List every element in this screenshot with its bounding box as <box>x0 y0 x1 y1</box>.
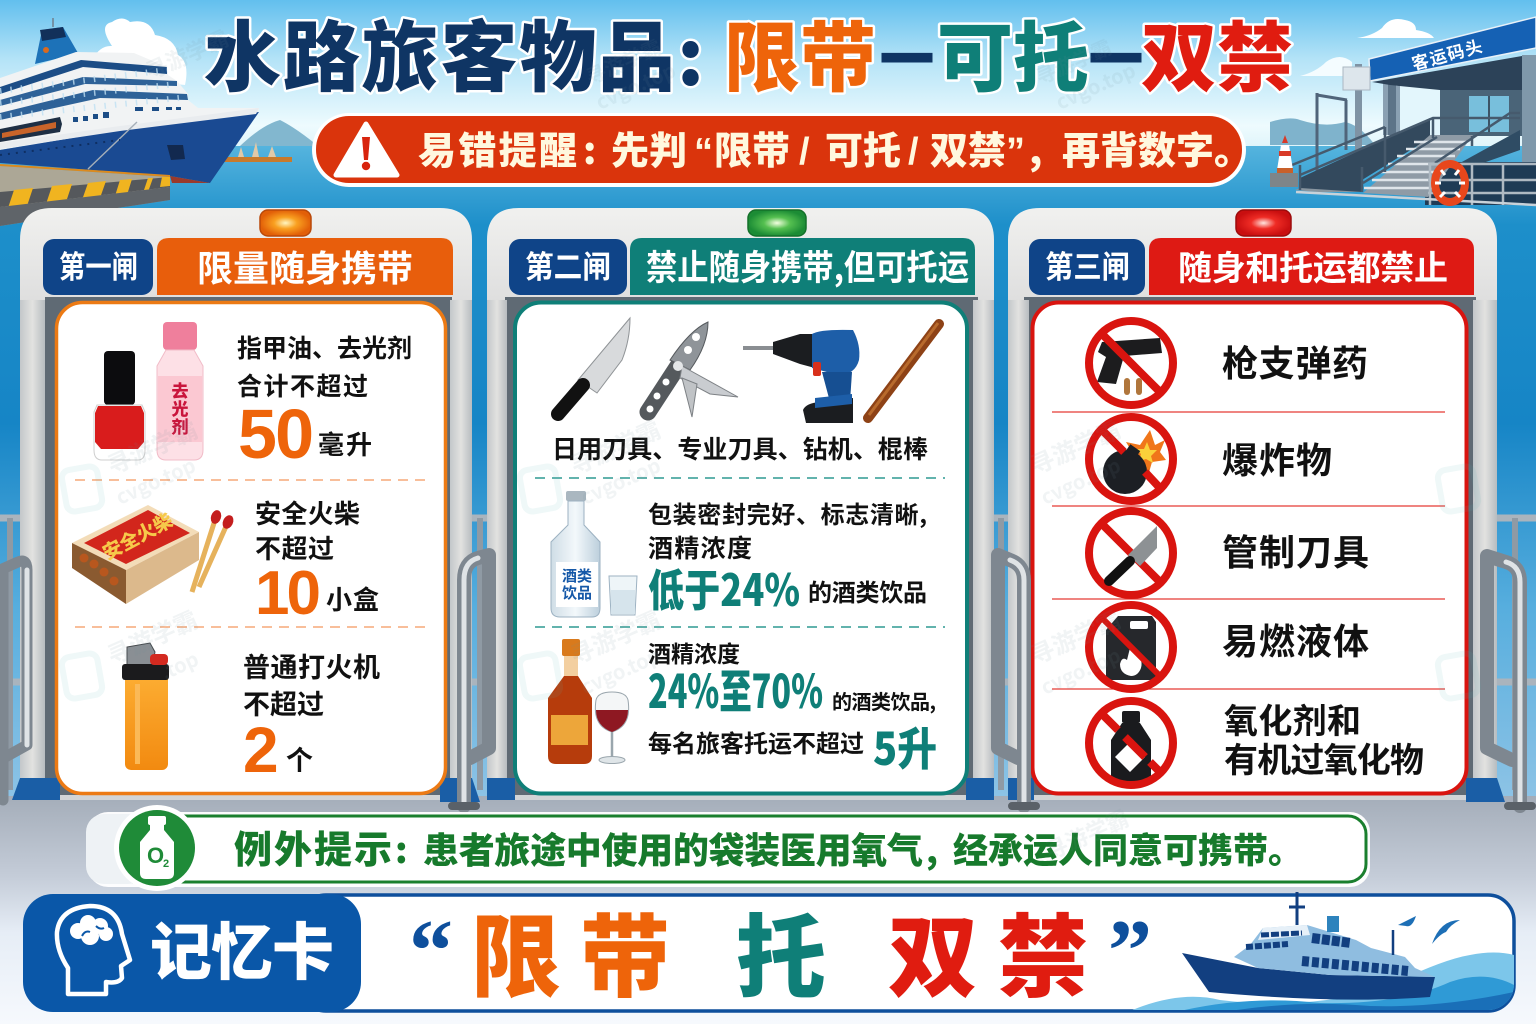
watermarks: cvgo.top <box>1036 450 1125 510</box>
gate number label 2: 第二闸 <box>525 242 611 287</box>
text: under 24 percent <box>648 495 927 619</box>
watermarks: cvgo.top <box>591 55 680 115</box>
text: under 24 percent: 低于24% <box>648 555 800 619</box>
icon: passenger boat <box>1182 892 1460 1000</box>
text: 24 to 70 percent <box>648 635 937 778</box>
panel: limited carry items <box>56 302 446 794</box>
text: lighter limit: 2 <box>243 714 279 786</box>
exception text <box>234 819 1303 874</box>
title: 水路旅客物品: <box>204 0 704 108</box>
watermarks: cvgo.top <box>576 450 665 510</box>
watermarks: 寻游学霸 <box>564 600 666 671</box>
text: lighter limit: 个 <box>286 739 313 778</box>
exception text: 患者旅途中使用的袋装医用氧气 <box>423 822 923 874</box>
terminal sign text: 客运码头 <box>1409 32 1485 75</box>
icon: oxygen bottle: 2 <box>163 858 169 870</box>
watermarks: 寻游学霸 <box>101 410 203 481</box>
text: under 24 percent: 包装密封完好、标志清晰, <box>648 495 927 530</box>
title: 可托 <box>937 0 1089 107</box>
icon: oxygen bottle <box>114 805 200 891</box>
title: 限带 <box>724 0 876 107</box>
icon: nail polish <box>94 351 145 460</box>
mnemonic text: 双禁 <box>888 885 1088 1015</box>
title: 双禁 <box>1141 0 1293 107</box>
icon: no flammable liquids <box>1089 605 1173 689</box>
text: 24 to 70 percent: 5升 <box>873 713 937 778</box>
text: lighter limit <box>243 646 380 786</box>
text: oxidizers: 有机过氧化物 <box>1224 733 1424 782</box>
banner text <box>418 120 1252 175</box>
icon: clear liquor bottle and glass <box>551 491 637 617</box>
heading: memory card label <box>23 894 361 1012</box>
icon: no controlled knives <box>1089 511 1173 595</box>
icon: lighter <box>122 643 169 770</box>
exception text: 经承运人同意可携带。 <box>953 823 1303 874</box>
icon: no explosives <box>1089 417 1173 501</box>
text: nail polish limit: 合计不超过 <box>237 367 368 403</box>
icon: safety matches <box>72 505 235 604</box>
banner text: 双禁 <box>930 120 1006 175</box>
icon: polish remover bottle: 去 <box>172 377 188 402</box>
exception note bar <box>86 805 1370 891</box>
text: nail polish limit <box>237 329 412 473</box>
chrome barrier handrails <box>0 555 1532 806</box>
text: nail polish limit: 50 <box>238 395 314 473</box>
watermarks: 寻游学霸 <box>1024 410 1126 481</box>
text: matches limit <box>255 494 379 628</box>
background: sky <box>0 0 1536 148</box>
banner text: “ <box>694 131 713 173</box>
mnemonic text: 托 <box>736 885 826 1015</box>
text: 24 to 70 percent: 24%至70% <box>648 656 823 722</box>
text: 24 to 70 percent: 每名旅客托运不超过 <box>648 724 864 759</box>
icon: safety matches: 安全火柴 <box>97 506 177 565</box>
watermarks: 寻游学霸 <box>140 21 233 86</box>
text: nail polish limit: 指甲油、去光剂 <box>237 329 412 365</box>
watermarks: 寻游学霸 <box>564 410 666 481</box>
heading: memory card label: 记忆卡 <box>150 902 334 992</box>
icon: polish remover bottle: 光 <box>172 395 188 420</box>
watermarks: 寻游学霸 <box>1024 600 1126 671</box>
banner text: 可托 <box>825 120 901 175</box>
gate 1: limited carry <box>12 208 480 802</box>
icon: folding knife <box>646 322 738 417</box>
text: matches limit: 10 <box>255 559 321 628</box>
watermarks: 寻游学霸 <box>581 31 666 90</box>
icon: wooden stick <box>868 323 939 418</box>
indicator light: red <box>1236 210 1291 236</box>
watermarks: 寻游学霸 <box>1040 801 1133 866</box>
background: sea <box>0 146 1536 806</box>
watermarks: .top <box>156 643 203 685</box>
banner text: 先判 <box>611 120 687 175</box>
banner text: ” <box>1006 131 1025 173</box>
mnemonic text <box>409 885 1152 1015</box>
text: lighter limit: 普通打火机 <box>243 646 380 685</box>
text: oxidizers: 氧化剂和 <box>1224 694 1361 743</box>
icon: polish remover bottle <box>157 322 203 460</box>
text: lighter limit: 不超过 <box>243 683 324 722</box>
panel: checked only items <box>515 302 967 794</box>
watermarks: 寻游学霸 <box>1031 31 1116 90</box>
watermarks: cvgo.top <box>1036 640 1125 700</box>
text: explosives: 爆炸物 <box>1222 432 1332 484</box>
gate 2: checked only <box>487 208 994 800</box>
icon: clear liquor bottle and glass: 饮品 <box>562 582 592 603</box>
gate frame 1 <box>20 208 472 800</box>
gate number label 2 <box>509 239 627 295</box>
heading: limited carry <box>157 238 453 295</box>
text: 24 to 70 percent: 的酒类饮品, <box>832 686 936 715</box>
clouds and distant mountains <box>92 18 1434 162</box>
mnemonic text: ” <box>1108 903 1152 1000</box>
icon: head with brain <box>57 906 130 994</box>
panel: banned items <box>1032 302 1466 794</box>
icon: polish remover bottle: 剂 <box>172 413 188 438</box>
text: matches limit: 不超过 <box>255 529 334 566</box>
background: deck floor <box>0 796 1536 1024</box>
illustration: passenger terminal <box>1270 17 1536 205</box>
illustration: pier <box>0 165 170 226</box>
gate number label 3: 第三闸 <box>1045 242 1130 287</box>
side and between-gate railing <box>0 518 1536 790</box>
gate frame 2 <box>487 208 994 800</box>
banner text: , <box>1029 120 1042 175</box>
icon: warning triangle <box>336 124 397 175</box>
heading: fully banned: 随身和托运都禁止 <box>1178 241 1448 290</box>
gate number label 1 <box>43 239 153 295</box>
text: under 24 percent: 酒精浓度 <box>648 529 752 565</box>
icon: no guns <box>1089 321 1173 405</box>
heading: limited carry: 限量随身携带 <box>197 240 413 292</box>
text: guns: 枪支弹药 <box>1222 335 1368 387</box>
waves behind boat <box>1130 952 1514 1011</box>
exception text: : <box>395 822 408 874</box>
text: matches limit: 安全火柴 <box>255 494 360 531</box>
banner text: : <box>583 120 596 175</box>
watermarks: cvgo.top <box>576 640 665 700</box>
text: controlled knives: 管制刀具 <box>1222 524 1369 576</box>
text: tools caption: 日用刀具、专业刀具、钻机、棍棒 <box>552 430 928 466</box>
banner text: / <box>908 131 919 173</box>
text: oxidizers <box>1224 694 1424 782</box>
memory card bar <box>23 885 1514 1015</box>
watermarks <box>61 21 1479 866</box>
indicator light: orange <box>260 210 311 236</box>
gate number label 1: 第一闸 <box>59 242 138 287</box>
watermarks: cvgo.top <box>111 450 200 510</box>
mnemonic text: “ <box>409 903 453 1000</box>
icon: clear liquor bottle and glass: 酒类 <box>562 565 592 586</box>
gate number label 3 <box>1029 239 1145 295</box>
icon: power drill <box>743 330 859 423</box>
gate frame 3 <box>1008 208 1497 800</box>
heading: checked only: 禁止随身携带,但可托运 <box>646 240 969 291</box>
text: flammable liquids: 易燃液体 <box>1222 613 1369 665</box>
gate 3: fully banned <box>1008 208 1505 802</box>
text: matches limit: 小盒 <box>326 580 379 617</box>
exception text: , <box>926 824 938 873</box>
icon: no oxidizers <box>1089 701 1173 785</box>
title <box>204 0 1293 108</box>
text: nail polish limit: 毫升 <box>318 425 372 462</box>
icon: kitchen knife <box>558 318 630 414</box>
text: under 24 percent: 的酒类饮品 <box>808 573 927 608</box>
title: — <box>884 28 930 80</box>
banner text: 易错提醒 <box>418 120 577 175</box>
banner text: 限带 <box>714 120 790 175</box>
text: 24 to 70 percent: 酒精浓度 <box>648 635 740 669</box>
watermarks: cvgo.top <box>1051 55 1140 115</box>
icon: spirits bottle and wine glass <box>548 639 629 764</box>
indicator light: green <box>748 210 806 236</box>
title: — <box>1093 28 1139 80</box>
watermarks: 寻游学霸 <box>101 600 203 671</box>
icon: oxygen bottle: O <box>147 843 164 868</box>
mnemonic text: 限带 <box>471 885 670 1015</box>
exception text: 例外提示 <box>234 819 392 874</box>
warning banner <box>312 113 1252 187</box>
banner text: 再背数字。 <box>1062 120 1252 175</box>
illustration: cruise ship <box>0 18 259 183</box>
banner text: / <box>799 131 810 173</box>
